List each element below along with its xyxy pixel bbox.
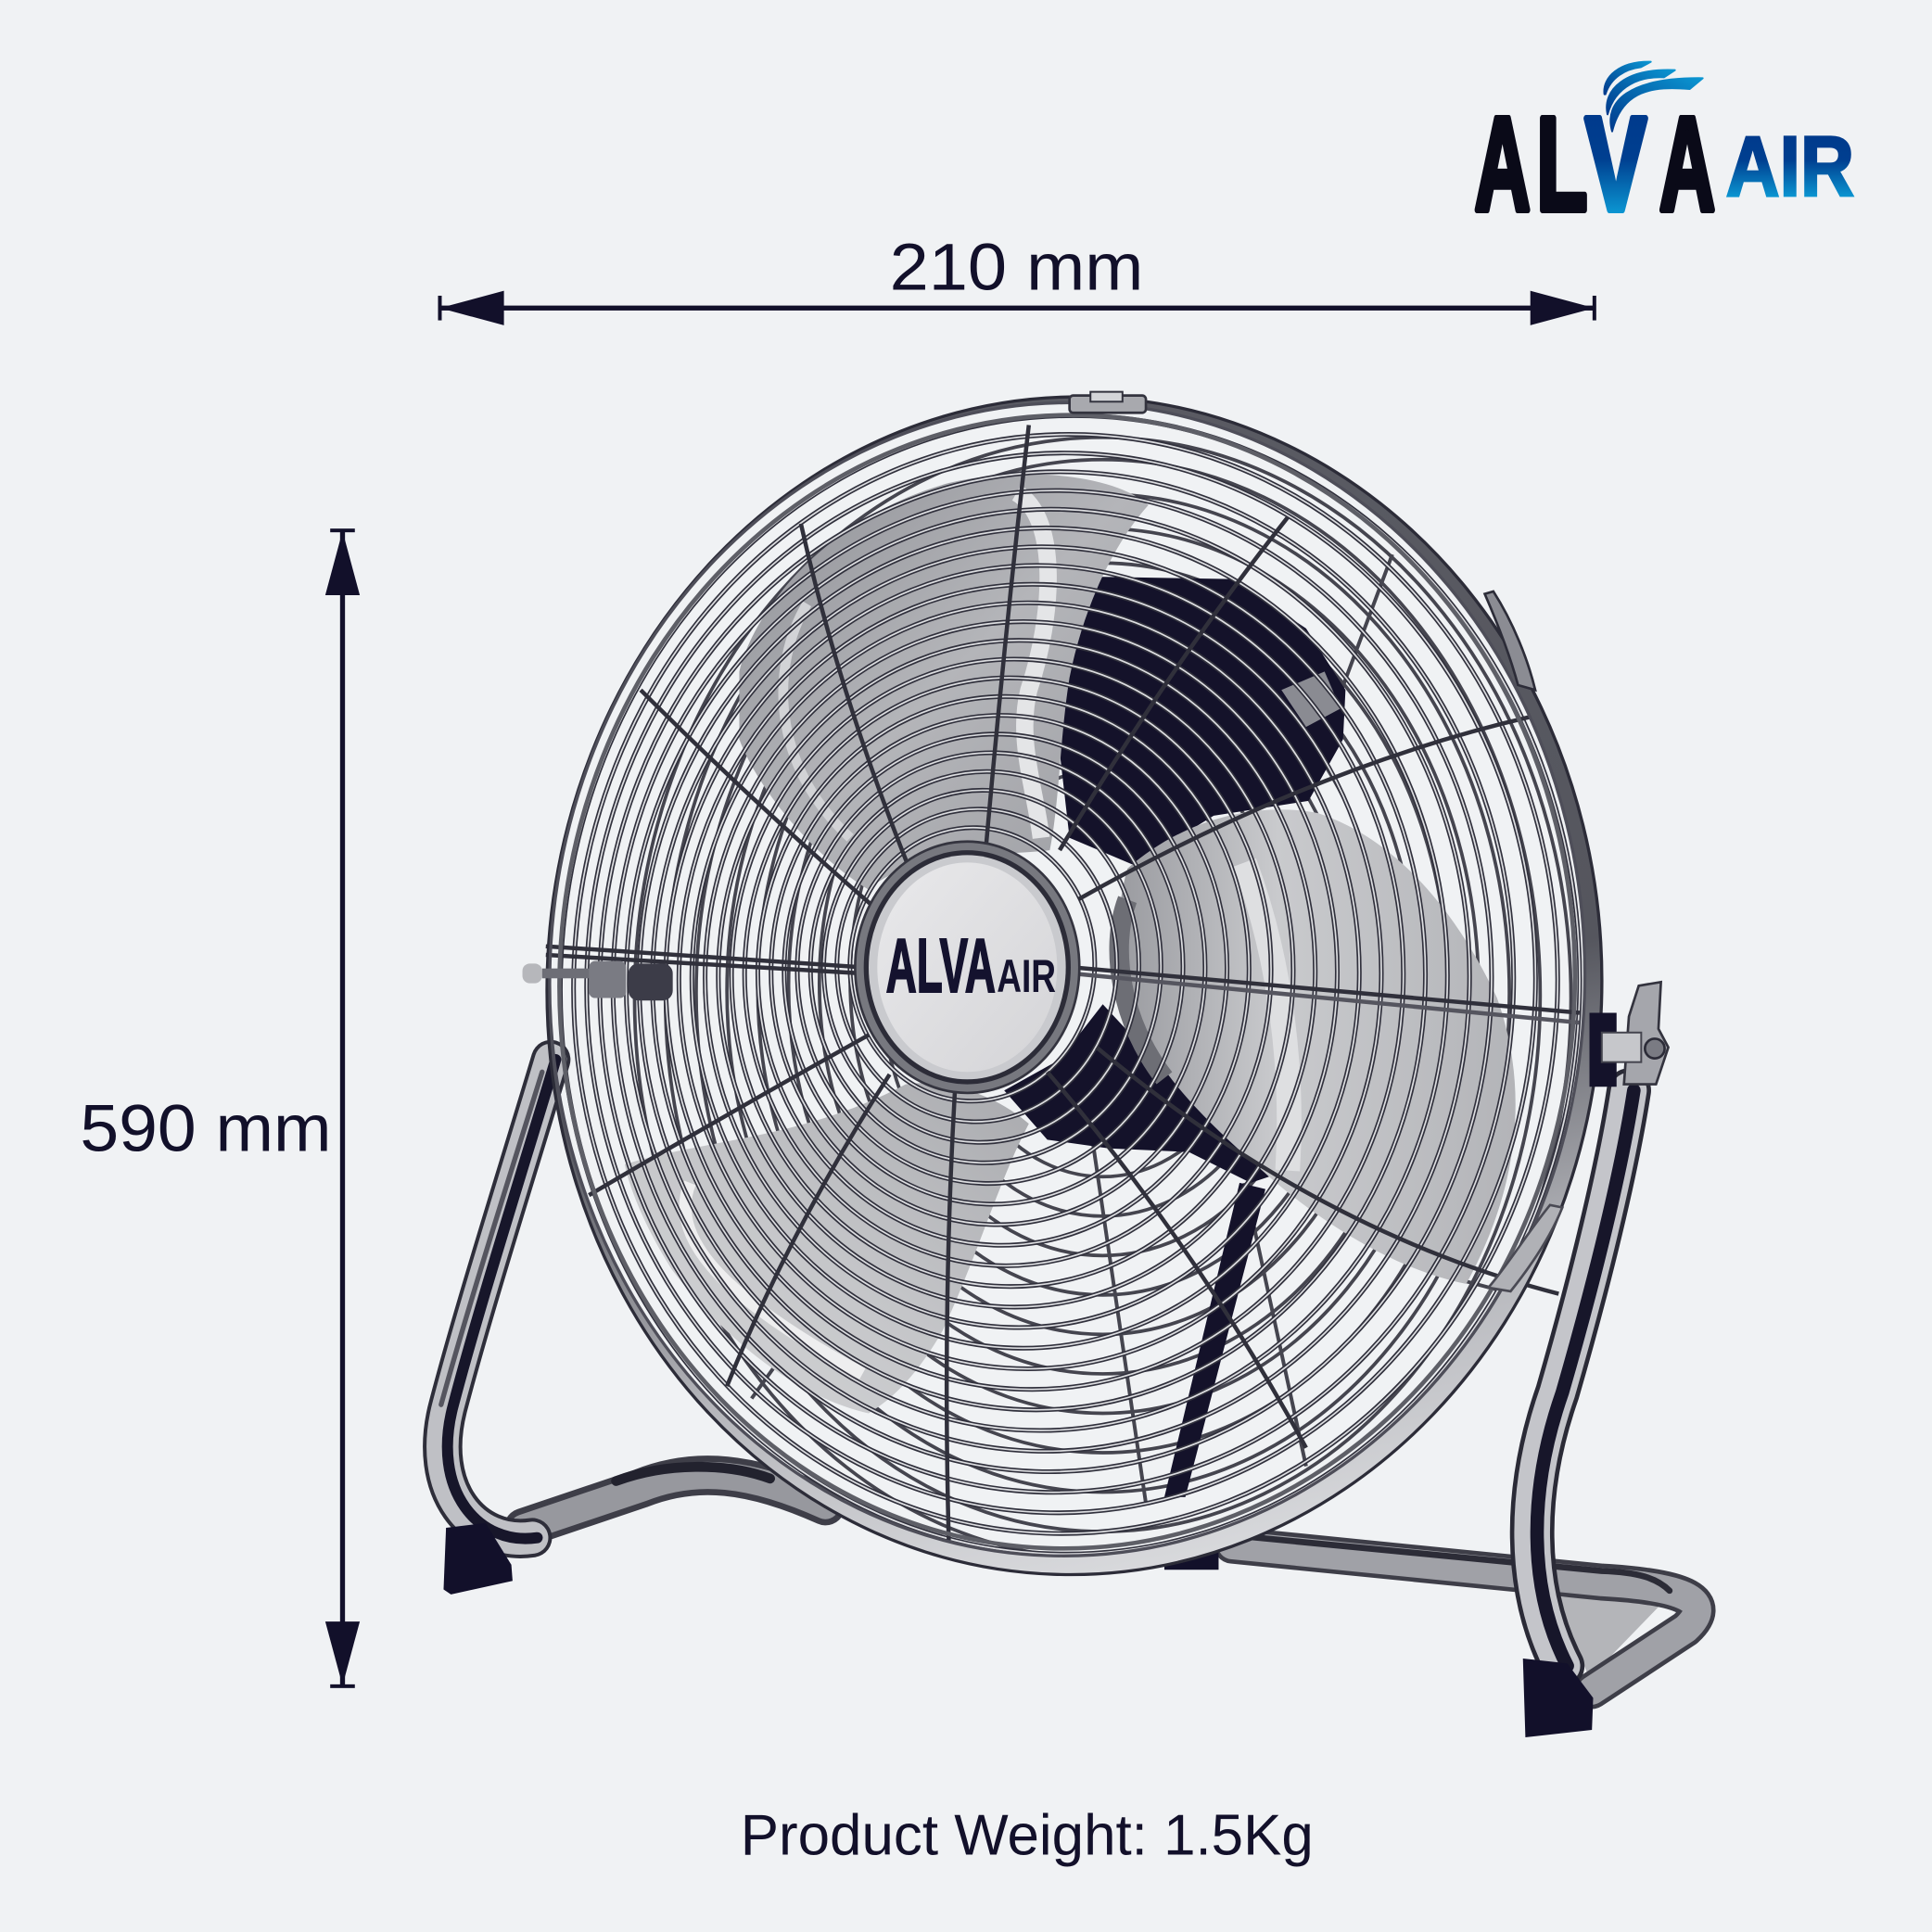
top hinge clip — [1070, 392, 1146, 413]
right upright leg — [1532, 1090, 1633, 1666]
logo: Alva Air — [1475, 62, 1854, 238]
logo wordmark ALVA: A — [1475, 90, 1531, 238]
left pivot bolt — [523, 961, 673, 1000]
right pivot bracket — [1590, 982, 1669, 1087]
width dimension label: 210 mm — [890, 230, 1143, 304]
front grille rings — [540, 398, 1599, 1571]
fan blade: top left — [739, 475, 1149, 890]
logo wordmark AIR: AIR — [1726, 118, 1854, 214]
logo wordmark ALVA — [1475, 90, 1715, 238]
back grille — [634, 438, 1571, 1558]
product illustration: floor fan — [441, 378, 1697, 1737]
radial grille spokes — [546, 426, 1580, 1540]
height dimension label: 590 mm — [80, 1091, 332, 1165]
outer rim — [527, 378, 1622, 1593]
small centre foot — [1164, 1550, 1218, 1570]
hub wordmark: AIR — [997, 949, 1056, 1002]
width dimension arrow — [438, 291, 1596, 325]
fan blade: bottom left — [625, 1083, 1029, 1413]
side clip: lower right — [1489, 1205, 1562, 1291]
motor housing, dark — [1004, 577, 1345, 1497]
fan blade: right — [1119, 809, 1516, 1284]
logo wordmark ALVA: V — [1585, 90, 1646, 238]
ring highlights — [540, 398, 1599, 1571]
logo wordmark ALVA: L — [1536, 90, 1587, 238]
right base rail — [1232, 1535, 1697, 1691]
logo wing swoosh — [1604, 62, 1703, 132]
left rubber foot — [443, 1523, 513, 1595]
hub badge with logo — [855, 842, 1079, 1093]
hub wordmark: ALVA — [886, 923, 996, 1009]
product weight: Product Weight: 1.5Kg — [741, 1802, 1314, 1867]
side clip: upper right — [1485, 591, 1535, 690]
logo wordmark ALVA: A — [1659, 90, 1715, 238]
height dimension arrow — [325, 528, 360, 1688]
right rubber foot — [1523, 1659, 1594, 1737]
ring shadows — [540, 398, 1599, 1571]
fan base and left leg — [441, 1060, 825, 1539]
